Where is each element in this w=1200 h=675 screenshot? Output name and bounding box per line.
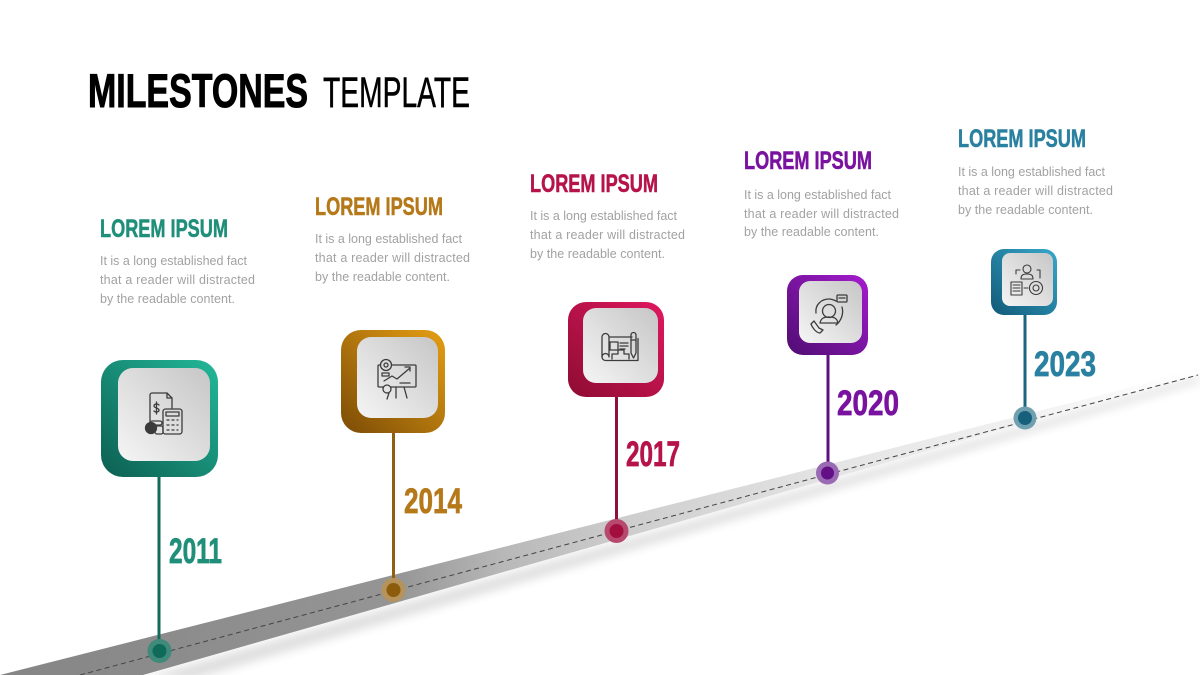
milestone 2023 xyxy=(958,125,1113,430)
description 2011: It is a long established fact xyxy=(100,254,248,268)
icon: presentation board xyxy=(378,360,416,399)
description 2011: by the readable content. xyxy=(100,292,235,306)
description 2014: by the readable content. xyxy=(315,270,450,284)
description 2020: that a reader will distracted xyxy=(744,207,899,221)
description 2017 xyxy=(530,209,685,261)
description 2014: It is a long established fact xyxy=(315,232,463,246)
year 2020: 2020 xyxy=(837,384,899,423)
heading 2017: LOREM IPSUM xyxy=(530,170,658,198)
icon: support agent xyxy=(811,295,847,333)
description 2023: by the readable content. xyxy=(958,203,1093,217)
connector stem 2011 xyxy=(158,475,160,651)
connector stem 2023 xyxy=(1024,313,1026,418)
heading 2023: LOREM IPSUM xyxy=(958,125,1086,153)
node dot 2014 xyxy=(382,578,406,602)
card 2020 xyxy=(787,275,868,355)
card 2014 xyxy=(341,330,445,433)
node dot 2020 xyxy=(816,462,839,484)
connector stem 2017 xyxy=(615,395,618,531)
node dot 2017 xyxy=(604,519,628,543)
heading 2011: LOREM IPSUM xyxy=(100,215,228,243)
description 2020 xyxy=(744,188,899,239)
title: MILESTONES xyxy=(88,64,308,117)
connector stem 2020 xyxy=(826,353,830,473)
icon: blueprint with pencil xyxy=(602,332,638,360)
timeline road xyxy=(0,370,1200,675)
milestone 2014 xyxy=(315,193,470,602)
icon: person, document and gear xyxy=(1011,265,1042,295)
description 2017: by the readable content. xyxy=(530,247,665,261)
year 2017: 2017 xyxy=(626,435,680,474)
connector stem 2014 xyxy=(392,431,395,590)
description 2011 xyxy=(100,254,255,306)
milestone 2020 xyxy=(744,147,899,484)
card 2011 xyxy=(101,360,218,477)
node dot 2023 xyxy=(1014,406,1036,430)
year 2023: 2023 xyxy=(1034,345,1096,384)
description 2023: that a reader will distracted xyxy=(958,184,1113,198)
milestone 2011 xyxy=(100,215,255,663)
description 2014: that a reader will distracted xyxy=(315,251,470,265)
heading 2014: LOREM IPSUM xyxy=(315,193,443,221)
description 2023 xyxy=(958,165,1113,217)
node dot 2011 xyxy=(148,639,172,663)
milestone 2017 xyxy=(530,170,685,543)
description 2011: that a reader will distracted xyxy=(100,273,255,287)
description 2017: It is a long established fact xyxy=(530,209,678,223)
description 2017: that a reader will distracted xyxy=(530,228,685,242)
icon: invoice and calculator xyxy=(146,393,182,434)
description 2020: It is a long established fact xyxy=(744,188,892,202)
description 2020: by the readable content. xyxy=(744,225,879,239)
title: TEMPLATE xyxy=(323,69,470,117)
card 2017 xyxy=(568,302,664,397)
card 2023 xyxy=(991,249,1057,315)
year 2011: 2011 xyxy=(169,532,222,571)
description 2014 xyxy=(315,232,470,284)
heading 2020: LOREM IPSUM xyxy=(744,147,872,175)
year 2014: 2014 xyxy=(404,482,462,521)
description 2023: It is a long established fact xyxy=(958,165,1106,179)
